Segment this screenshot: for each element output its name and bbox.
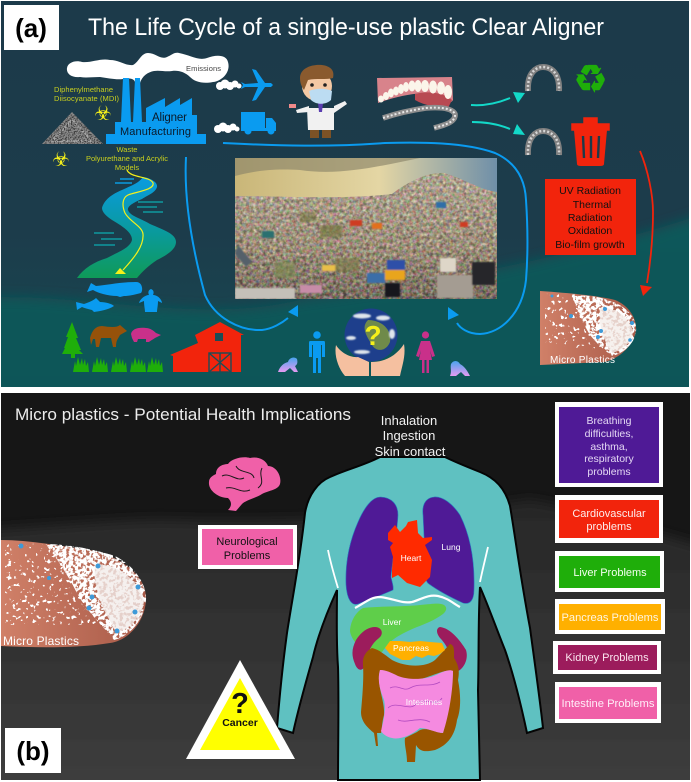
icon: biohazard 2: ☣ [52, 149, 70, 171]
callout: cancer warning triangle: Cancer [222, 717, 258, 729]
icon: tree [62, 322, 83, 358]
exposure routes: Ingestion [383, 428, 435, 443]
icon: turtle [139, 289, 162, 312]
label box (a): (a) [15, 13, 47, 43]
blue arrow: manufacturing to landfill loop right [223, 143, 528, 334]
diaphragm [355, 596, 460, 608]
icon: brain [209, 457, 280, 511]
callout: pancreas problems: Pancreas Problems [562, 612, 659, 624]
callout: breathing difficulties: asthma, [590, 441, 628, 453]
rib highlights [328, 547, 488, 588]
panel (a): life cycle background [0, 1, 691, 400]
callout: breathing difficulties: difficulties, [585, 428, 633, 440]
river motion lines [94, 179, 163, 245]
lungs [346, 497, 474, 604]
microplastics on finger (a) [540, 291, 636, 366]
icon: truck with exhaust [214, 112, 276, 134]
factory: aligner manufacturing: Aligner [152, 112, 187, 124]
callout: intestine problems [555, 682, 661, 723]
red arrow to microplastics [640, 151, 653, 296]
dentist character [289, 65, 347, 138]
organ labels: Pancreas [393, 643, 429, 653]
callout: intestine problems: Intestine Problems [562, 698, 655, 710]
photo: plastic waste landfill [235, 158, 497, 299]
human torso [277, 457, 543, 780]
microplastics on finger (b): Micro Plastics [3, 634, 79, 648]
exposure routes: Inhalation [381, 413, 437, 428]
person: woman [416, 331, 435, 373]
callout: liver problems: Liver Problems [573, 567, 647, 579]
label box (a) [4, 5, 59, 50]
emissions cloud [67, 53, 229, 83]
callout: cardiovascular problems [555, 495, 663, 543]
liver [350, 604, 446, 652]
small intestine [379, 670, 453, 738]
factory: aligner manufacturing [106, 78, 206, 144]
callout: breathing difficulties: respiratory [584, 453, 635, 465]
icon: recycle: ♻ [573, 59, 608, 101]
icon: fish [76, 298, 114, 312]
MDI label: Diisocyanate (MDI) [54, 94, 120, 103]
earth held in hands with question mark: ? [364, 320, 382, 351]
degradation factors box [545, 179, 636, 255]
degradation factors box: Thermal [573, 199, 611, 211]
kidneys [352, 627, 467, 672]
MDI label: Diphenylmethane [54, 85, 113, 94]
aligner bottom [528, 131, 559, 155]
exposure routes: Skin contact [375, 444, 446, 459]
icon: grass row [73, 357, 163, 372]
callout: cardiovascular problems: Cardiovascular [572, 508, 646, 520]
degradation factors box: Bio-film growth [555, 239, 625, 251]
person: baby right [450, 361, 470, 376]
factory: aligner manufacturing: Manufacturing [120, 126, 191, 138]
callout: neurological problems: Problems [224, 550, 271, 562]
person: man [309, 331, 325, 373]
icon: plane with exhaust [216, 69, 273, 101]
callout: kidney problems [553, 641, 661, 674]
callout: cardiovascular problems: problems [586, 521, 632, 533]
label box (b): (b) [16, 736, 50, 766]
panel (b): health implications background [0, 393, 691, 782]
colon [361, 644, 460, 762]
teeth with aligner [377, 77, 455, 128]
callout: neurological problems [198, 525, 297, 569]
organ labels: Liver [383, 617, 401, 627]
callout: kidney problems: Kidney Problems [565, 652, 649, 664]
pile of pellets [42, 112, 103, 144]
callout: neurological problems: Neurological [216, 536, 278, 548]
callout: breathing difficulties: problems [587, 466, 631, 478]
degradation factors box: Oxidation [568, 225, 612, 237]
callout: liver problems [555, 551, 664, 592]
waste label: Waste [117, 145, 137, 154]
callout: cancer warning triangle: ? [231, 688, 249, 720]
waste path line [115, 170, 153, 274]
degradation factors box: UV Radiation [559, 185, 621, 197]
callout: cancer warning triangle [186, 660, 295, 759]
waste label [86, 145, 168, 172]
title: The Life Cycle of a single-use plastic Clear Aligner [88, 14, 604, 41]
organ labels: Heart [401, 553, 422, 563]
label box (b) [5, 728, 61, 773]
organ labels [383, 542, 461, 707]
teal arrow to reuse [471, 92, 525, 105]
earth held in hands with question mark [335, 308, 405, 376]
callout: breathing difficulties [555, 402, 663, 487]
icon: trash can [572, 118, 609, 166]
microplastics on finger (b) [1, 540, 146, 648]
icon: pig [131, 328, 161, 342]
emissions cloud: Emissions [186, 64, 221, 73]
heart [388, 520, 432, 587]
MDI label [54, 85, 120, 103]
icon: cow [90, 325, 127, 347]
teal arrow to disposal [472, 122, 525, 135]
microplastics on finger (a): Micro Plastics [550, 355, 615, 366]
river [77, 177, 176, 278]
pancreas [385, 641, 445, 660]
blue arrow: landfill left [186, 157, 298, 330]
waste label: Models [115, 163, 139, 172]
person: baby left [278, 358, 298, 372]
icon: barn [170, 322, 244, 372]
organ labels: Lung [442, 542, 461, 552]
organ labels: Intestines [406, 697, 442, 707]
waste label: Polyurethane and Acrylic [86, 154, 168, 163]
panel (b) heading: Micro plastics - Potential Health Implications [15, 405, 351, 424]
degradation factors box: Radiation [568, 212, 612, 224]
icon: whale [87, 282, 142, 297]
callout: breathing difficulties: Breathing [587, 415, 632, 427]
exposure routes [375, 413, 446, 459]
icon: biohazard 1: ☣ [94, 103, 112, 125]
aligner top [528, 67, 559, 91]
callout: pancreas problems [555, 599, 665, 634]
